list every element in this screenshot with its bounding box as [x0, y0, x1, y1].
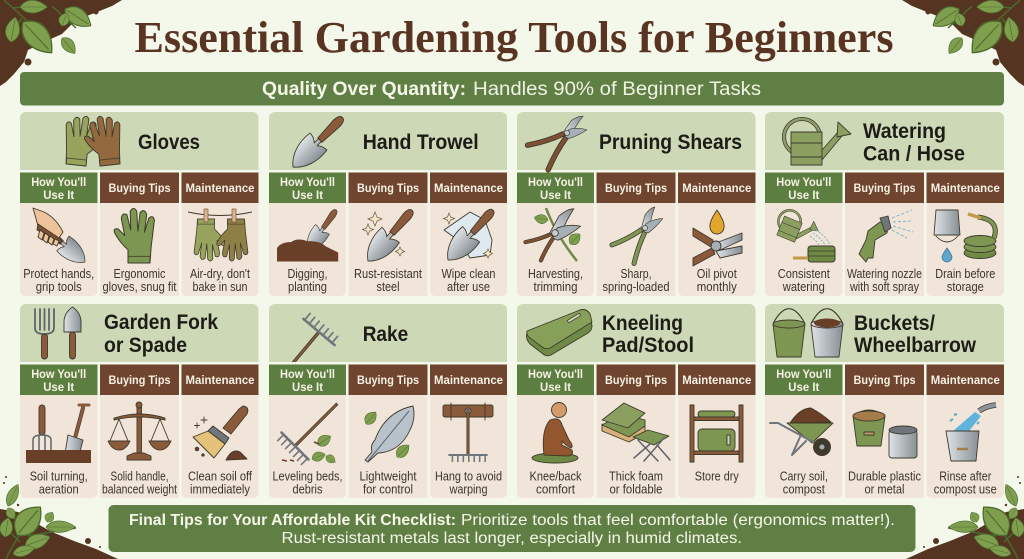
icon: balance scale: [108, 402, 171, 460]
column tabs: How You'll: [776, 175, 831, 189]
panel: Garden Fork or Spade: [20, 304, 258, 498]
text: soil turning: [30, 468, 88, 496]
icon: pruning shears: [528, 114, 590, 170]
text: rinse after: [934, 468, 997, 496]
text: hang to avoid: [435, 468, 502, 496]
text: harvesting: Harvesting,: [528, 266, 583, 281]
text: thick foam: Thick foam: [609, 468, 663, 484]
icon: hose rinsing bucket: [946, 405, 996, 461]
text: leveling beds: Leveling beds,: [272, 468, 342, 484]
text: soil turning: Soil turning,: [30, 468, 88, 484]
text: ergonomic gloves: gloves, snug fit: [102, 279, 177, 294]
text: oil pivot: monthly: [697, 279, 737, 294]
column tabs: Maintenance: [931, 373, 1000, 387]
text: protect hands: [23, 266, 94, 294]
text: watering nozzle: [847, 266, 922, 294]
corner decoration: bottom right soil and leaves: [906, 476, 1024, 559]
panel: Buckets/Wheelbarrow: [765, 304, 1004, 498]
icon: shears cutting a stem: [525, 206, 585, 261]
title: Essential Gardening Tools for Beginners: [134, 13, 894, 62]
column tabs: How You'll: [776, 367, 831, 381]
column tabs: Use It: [540, 188, 571, 202]
text: lightweight: [360, 468, 417, 496]
text: consistent watering: Consistent: [778, 266, 830, 281]
column tabs: Use It: [292, 188, 323, 202]
callout: final tips: Final Tips for Your Affordable Kit Checklist:: [129, 512, 456, 529]
text: protect hands: grip tools: [36, 279, 82, 294]
text: soil turning: aeration: [39, 482, 79, 496]
icon: inverted bucket and coiled hose: [934, 210, 996, 262]
text: digging: planting: [288, 279, 327, 294]
column tabs: How You'll: [528, 367, 583, 381]
icon: two buckets: [773, 309, 843, 357]
icon: kneeling pad: [526, 310, 592, 356]
text: knee/back comfort: Knee/back: [530, 468, 582, 484]
icon: ergonomic glove: [114, 209, 154, 263]
icon: brush cleaning soil: [193, 406, 248, 460]
corner decoration: top right soil and leaves: [902, 0, 1024, 86]
text: air-dry: bake in sun: [192, 279, 248, 294]
text: ergonomic gloves: Ergonomic: [114, 266, 166, 281]
banner: quality over quantity: Handles 90% of Beginner Tasks: [473, 79, 761, 100]
column tabs: [517, 172, 756, 203]
panel: Kneeling Pad/Stool: [517, 304, 756, 498]
heading: Garden Fork or Spade: Garden Fork: [104, 310, 218, 334]
text: carry soil: compost: [783, 482, 825, 496]
heading: Watering Can / Hose: [863, 119, 965, 166]
icon: wheelbarrow: [770, 408, 833, 456]
column tabs: Maintenance: [931, 181, 1000, 195]
text: carry soil: [780, 468, 828, 496]
column tabs: Buying Tips: [605, 181, 667, 195]
column tabs: Maintenance: [434, 181, 503, 195]
column tabs: Use It: [43, 380, 74, 394]
text: sharp: Sharp,: [620, 266, 652, 281]
text: solid handle: balanced weight: [102, 482, 177, 496]
heading: Garden Fork or Spade: or Spade: [104, 333, 187, 357]
text: wipe clean: [442, 266, 496, 294]
text: ergonomic gloves: [102, 266, 177, 294]
icon: pair of gloves: [62, 114, 124, 167]
text: wipe clean: after use: [447, 279, 490, 294]
column tabs: [269, 364, 507, 395]
column tabs: How You'll: [31, 367, 86, 381]
callout: final tips: [108, 505, 916, 552]
panel: Rake: [265, 304, 507, 498]
text: thick foam: [609, 468, 663, 496]
column tabs: Use It: [43, 188, 74, 202]
text: watering nozzle: with soft spray: [849, 279, 919, 294]
icon: rake and leaves: [275, 390, 351, 466]
text: clean soil off: [188, 468, 252, 496]
text: knee/back comfort: [530, 468, 582, 496]
text: rust-resistant: steel: [376, 279, 400, 294]
heading: Buckets/Wheelbarrow: [854, 311, 976, 357]
column tabs: How You'll: [280, 175, 335, 189]
text: durable plastic: [848, 468, 921, 496]
column tabs: Maintenance: [682, 373, 752, 387]
icon: storage shelf: [690, 405, 743, 462]
column tabs: Buying Tips: [605, 373, 667, 387]
heading: Buckets/Wheelbarrow: Wheelbarrow: [854, 333, 976, 357]
column tabs: [517, 364, 756, 395]
text: hang to avoid: warping: [449, 482, 488, 496]
column tabs: Buying Tips: [357, 373, 419, 387]
column tabs: Maintenance: [186, 181, 255, 195]
column tabs: Maintenance: [186, 373, 255, 387]
text: drain before storage: [935, 266, 995, 294]
panel: Pruning Shears: [517, 112, 756, 296]
panel: Hand Trowel: [269, 109, 507, 296]
icon: spray nozzle: [859, 210, 913, 262]
text: sharp: [602, 266, 670, 294]
heading: Watering Can / Hose: Watering: [863, 119, 946, 143]
column tabs: Maintenance: [434, 373, 503, 387]
text: hang to avoid: Hang to avoid: [435, 468, 502, 484]
text: watering nozzle: Watering nozzle: [847, 266, 922, 281]
column tabs: How You'll: [528, 175, 583, 189]
heading: Gloves: Gloves: [138, 130, 200, 154]
icon: hand trowel: [284, 109, 351, 176]
heading: Watering Can / Hose: Can / Hose: [863, 142, 965, 166]
banner: quality over quantity: Quality Over Quantity:: [262, 79, 466, 100]
icon: gloves on a clothesline: [188, 209, 252, 261]
column tabs: Use It: [292, 380, 323, 394]
column tabs: How You'll: [31, 175, 86, 189]
text: lightweight: for control: [363, 482, 413, 496]
text: protect hands: Protect hands,: [23, 266, 94, 281]
text: store dry: Store dry: [695, 468, 739, 484]
corner decoration: top left soil and leaves: [0, 0, 122, 86]
text: sharp: spring-loaded: [602, 279, 670, 294]
icon: fork and spade in soil: [26, 405, 91, 463]
icon: spring-loaded shears: [612, 205, 665, 263]
text: air-dry: Air-dry, don't: [190, 266, 250, 281]
icon: hand gripping trowel: [33, 208, 91, 270]
text: oil pivot: Oil pivot: [697, 266, 737, 281]
text: carry soil: Carry soil,: [780, 468, 828, 484]
text: rinse after: compost use: [934, 482, 997, 496]
text: air-dry: [190, 266, 250, 294]
column tabs: [20, 364, 258, 395]
heading: Rake: Rake: [363, 322, 408, 346]
heading: Kneeling Pad/Stool: [602, 311, 694, 357]
column tabs: Buying Tips: [854, 373, 916, 387]
column tabs: Buying Tips: [854, 181, 916, 195]
icon: can pouring above hose: [773, 207, 835, 262]
heading: Buckets/Wheelbarrow: Buckets/: [854, 311, 935, 335]
column tabs: [765, 172, 1004, 203]
column tabs: Use It: [788, 380, 819, 394]
text: harvesting: trimming: [534, 279, 578, 294]
text: leveling beds: debris: [292, 482, 323, 496]
text: durable plastic: Durable plastic: [848, 468, 921, 484]
column tabs: Buying Tips: [108, 373, 171, 387]
icon: oil drop on pivot: [693, 210, 742, 266]
heading: Kneeling Pad/Stool: Pad/Stool: [602, 333, 694, 357]
column tabs: Use It: [788, 188, 819, 202]
text: drain before storage: Drain before: [935, 266, 995, 281]
column tabs: Buying Tips: [357, 181, 419, 195]
text: durable plastic: or metal: [864, 482, 905, 496]
icon: fork and spade: [35, 307, 81, 359]
heading: Garden Fork or Spade: [104, 310, 218, 357]
callout: final tips: Prioritize tools that feel comfortable (ergonomics matter!).: [461, 512, 895, 529]
text: oil pivot: [697, 266, 737, 294]
icon: foam pads and folding stool: [602, 403, 670, 461]
text: clean soil off: Clean soil off: [188, 468, 252, 484]
banner: quality over quantity: [20, 72, 1004, 106]
text: rust-resistant: [354, 266, 422, 294]
icon: trowel and cloth: [439, 202, 502, 268]
text: digging: [288, 266, 328, 294]
text: digging: Digging,: [288, 266, 328, 281]
text: drain before storage: storage: [947, 279, 984, 294]
text: wipe clean: Wipe clean: [442, 266, 496, 281]
icon: shiny steel trowel: [359, 202, 421, 269]
text: rust-resistant: Rust-resistant: [354, 266, 422, 281]
callout: final tips: Rust-resistant metals last longer, especially in humid climates.: [282, 530, 742, 547]
icon: feather and leaves: [362, 406, 414, 462]
icon: trowel in soil: [277, 205, 343, 262]
heading: Pruning Shears: Pruning Shears: [599, 130, 742, 154]
text: knee/back comfort: comfort: [536, 482, 575, 496]
text: consistent watering: [778, 266, 830, 294]
panel: Watering Can / Hose: [765, 112, 1004, 296]
column tabs: How You'll: [280, 367, 335, 381]
text: consistent watering: watering: [782, 279, 825, 294]
heading: Hand Trowel: Hand Trowel: [363, 130, 479, 154]
column tabs: Maintenance: [682, 181, 752, 195]
icon: rake: [292, 312, 338, 362]
icon: plastic bucket and metal can: [853, 410, 917, 458]
text: lightweight: Lightweight: [360, 468, 417, 484]
column tabs: [765, 364, 1004, 395]
icon: rake hanging on rack: [443, 403, 493, 462]
text: rinse after: Rinse after: [939, 468, 992, 484]
icon: kneeling person: [532, 402, 578, 463]
column tabs: Buying Tips: [108, 181, 171, 195]
text: thick foam: or foldable: [610, 482, 662, 496]
icon: watering can: [784, 119, 851, 165]
column tabs: Use It: [540, 380, 571, 394]
heading: Kneeling Pad/Stool: Kneeling: [602, 311, 683, 335]
column tabs: [269, 172, 507, 203]
panel: Gloves: [20, 112, 258, 296]
text: solid handle: Solid handle,: [110, 468, 168, 484]
text: leveling beds: [272, 468, 342, 496]
text: solid handle: [102, 468, 177, 496]
text: clean soil off: immediately: [190, 482, 250, 496]
corner decoration: bottom left soil and leaves: [0, 476, 118, 559]
text: harvesting: [528, 266, 583, 294]
column tabs: [20, 172, 258, 203]
